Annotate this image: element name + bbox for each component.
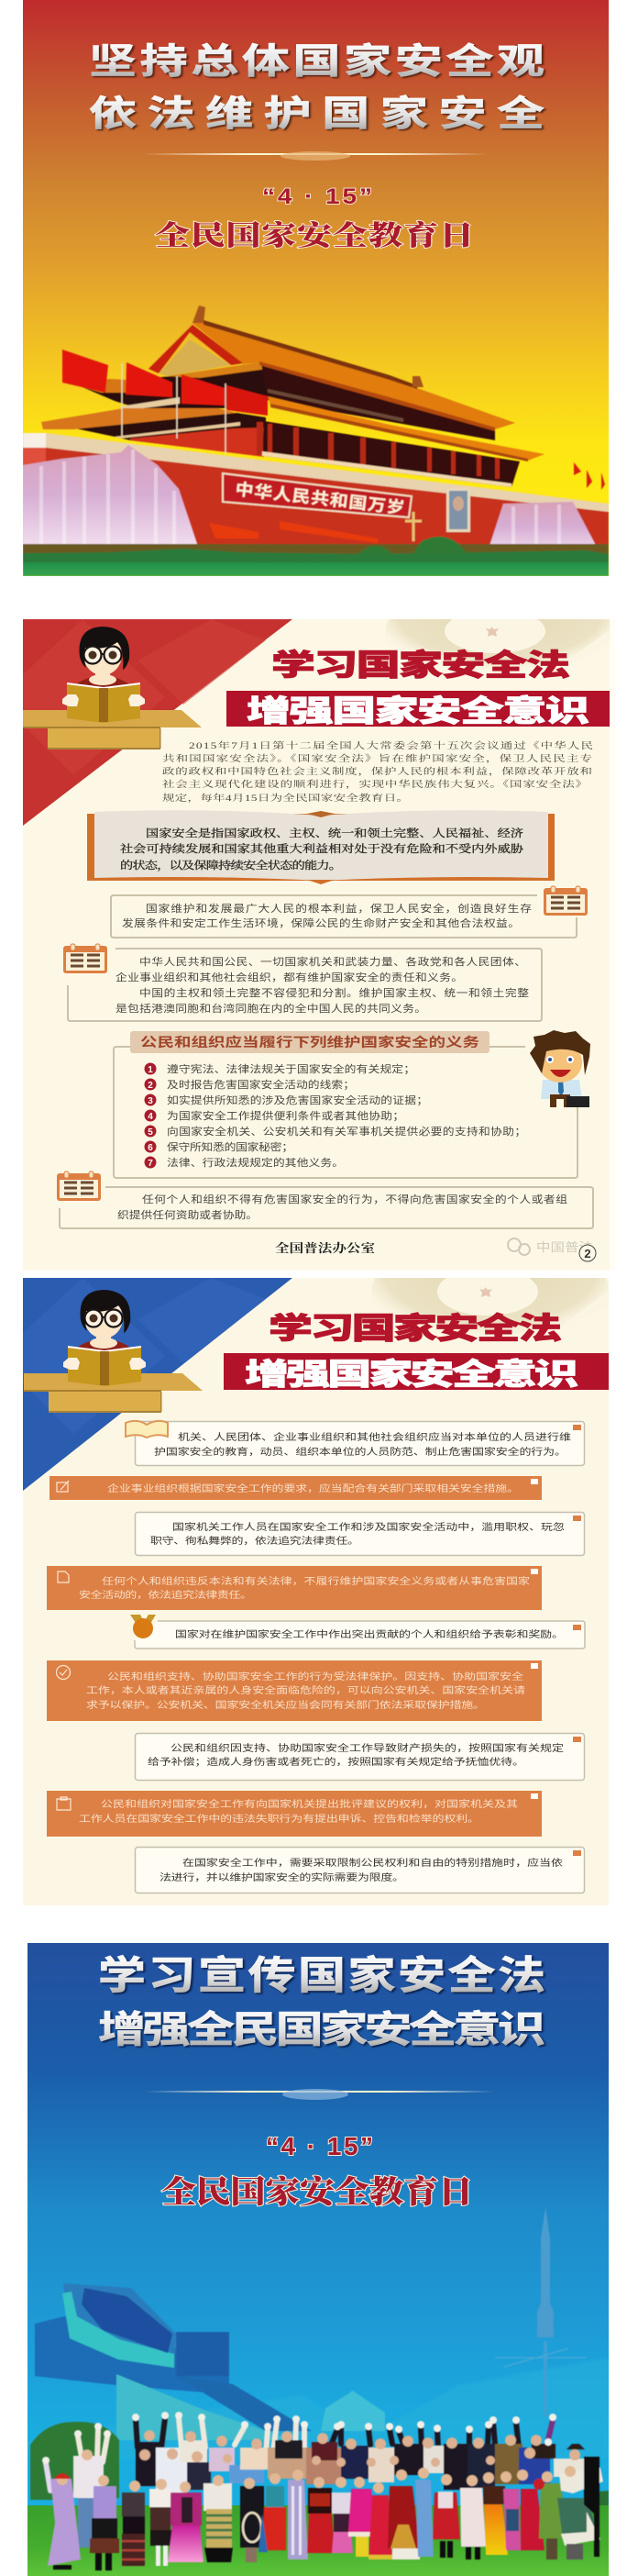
swirl ornament xyxy=(372,1278,609,1332)
red hat xyxy=(54,2473,71,2479)
panel: blue Great Wall poster xyxy=(28,1943,609,2576)
text box A: 发展条件和安定工作生活环境，保障公民的生命财产安全和其他合法权益。 xyxy=(122,917,520,929)
date 4.15: “4 · 15” xyxy=(262,183,372,208)
icon: calendar B xyxy=(63,944,107,973)
lower roof xyxy=(268,396,544,461)
portrait xyxy=(446,488,470,532)
orange bar 1 xyxy=(50,1476,542,1500)
watermark: 2 xyxy=(584,1247,591,1260)
ornament divider xyxy=(145,2089,495,2100)
heading: study law: 学习国家安全法 xyxy=(271,649,570,682)
illustration: Tiananmen gate xyxy=(23,305,609,576)
duties items: 遵守宪法、法律法规关于国家安全的有关规定； xyxy=(167,1063,415,1075)
education day heading: 全民国家安全教育日 xyxy=(155,220,474,251)
icon: open book xyxy=(126,1421,168,1438)
raised arms xyxy=(46,2418,553,2491)
duties heading pill: 公民和组织应当履行下列维护国家安全的义务 xyxy=(140,1035,479,1049)
intro paragraph: 政的政权和中国特色社会主义制度，保护人民的根本利益，保障改革开放和 xyxy=(162,766,592,776)
intro paragraph: 规定，每年4月15日为全民国家安全教育日。 xyxy=(162,793,409,803)
note card 2: 职守、徇私舞弊的，依法追究法律责任。 xyxy=(150,1535,359,1547)
note card 4: 公民和组织因支持、协助国家安全工作导致财产损失的，按照国家有关规定 xyxy=(170,1742,564,1754)
title line 2: 依法维护国家安全 xyxy=(89,94,544,133)
duties items: 法律、行政法规规定的其他义务。 xyxy=(167,1157,344,1169)
icon: check circle xyxy=(57,1666,70,1679)
fountains xyxy=(23,445,600,552)
duties number bullets: 7 xyxy=(148,1159,153,1169)
reader character on box xyxy=(23,627,202,749)
duties items xyxy=(167,1063,526,1169)
education day heading: 全民国家安全教育日 xyxy=(161,2174,473,2210)
colonnade xyxy=(257,421,520,487)
duties number bullets: 4 xyxy=(148,1112,153,1122)
duties number bullets: 3 xyxy=(148,1096,153,1106)
orange bar 1: 企业事业组织根据国家安全工作的要求，应当配合有关部门采取相关安全措施。 xyxy=(107,1482,519,1494)
reader character on box xyxy=(24,1290,203,1413)
text box D xyxy=(60,1187,593,1228)
rocket and launch tower xyxy=(495,2207,587,2416)
panel: red Tiananmen poster xyxy=(23,0,609,576)
back row heads xyxy=(139,2430,580,2467)
orange bar 2: 任何个人和组织违反本法和有关法律，不履行维护国家安全义务或者从事危害国家 xyxy=(102,1575,530,1587)
banner slogan: 中华人民共和国万岁 xyxy=(234,480,406,518)
note card 4 xyxy=(136,1734,585,1780)
blue corner triangle xyxy=(23,1278,292,1491)
open book definition box xyxy=(87,810,555,884)
panel: blue law-study poster xyxy=(23,1233,610,1905)
front row faces xyxy=(57,2449,576,2493)
orange bar 4 xyxy=(47,1791,542,1837)
watermark: 中国普法 xyxy=(536,1240,593,1255)
red flags xyxy=(62,350,605,490)
heading: study law: 学习国家安全法 xyxy=(269,1312,562,1345)
note card 5: 法进行，并以维护国家安全的实际需要为限度。 xyxy=(160,1871,404,1883)
upper storey xyxy=(261,363,495,440)
text box D: 任何个人和组织不得有危害国家安全的行为，不得向危害国家安全的个人或者组 xyxy=(142,1194,567,1205)
left wing lower tier xyxy=(41,408,266,457)
text box B: 中国的主权和领土完整不容侵犯和分割。维护国家主权、统一和领土完整 xyxy=(139,987,529,999)
note card 2 xyxy=(136,1512,585,1556)
orange bar 3: 工作，本人或者其近亲属的人身安全面临危险的，可以向公安机关、国家安全机关请 xyxy=(86,1684,525,1696)
open book definition box: 国家安全是指国家政权、主权、统一和领土完整、人民福祉、经济 xyxy=(146,827,523,839)
lamp xyxy=(405,512,422,541)
duties number bullets xyxy=(145,1062,156,1169)
note card 2: 国家机关工作人员在国家安全工作和涉及国家安全活动中，滥用职权、玩忽 xyxy=(172,1521,565,1533)
duties number bullets: 6 xyxy=(148,1143,153,1153)
intro paragraph: 2015年7月1日第十二届全国人大常委会第十五次会议通过《中华人民 xyxy=(189,740,593,750)
watermark xyxy=(508,1238,596,1261)
text box B xyxy=(68,949,542,1021)
duties number bullets: 2 xyxy=(148,1081,153,1091)
poster 2 background xyxy=(23,619,615,1271)
duties items: 保守所知悉的国家秘密； xyxy=(167,1141,293,1153)
icon: medal xyxy=(130,1615,156,1638)
footer issuer: 全国普法办公室 xyxy=(275,1240,375,1256)
text box B: 中华人民共和国公民、一切国家机关和武装力量、各政党和各人民团体、 xyxy=(139,956,526,968)
orange bar 2: 安全活动的，依法追究法律责任。 xyxy=(79,1589,252,1601)
cartoon man with briefcase xyxy=(530,1030,590,1107)
grass and hedges xyxy=(23,537,609,576)
note card 1: 护国家安全的教育，动员、组织本单位的人员防范、制止危害国家安全的行为。 xyxy=(154,1446,566,1458)
poster gradient background xyxy=(23,0,609,576)
note card 3 xyxy=(135,1621,585,1649)
note card 5 xyxy=(136,1848,585,1893)
note card 3: 国家对在维护国家安全工作中作出突出贡献的个人和组织给予表彰和奖励。 xyxy=(175,1628,564,1640)
red corner triangle xyxy=(23,619,292,826)
poster gradient background xyxy=(28,1943,609,2505)
back row torsos xyxy=(136,2440,590,2493)
open book definition box: 的状态，以及保障持续安全状态的能力。 xyxy=(120,859,342,872)
note card 5: 在国家安全工作中，需要采取限制公民权利和自由的特别措施时，应当依 xyxy=(182,1857,563,1869)
icon: pencil note xyxy=(57,1481,69,1492)
intro paragraph: 社会主义现代化建设的顺利进行，实现中华民族伟大复兴。《国家安全法》 xyxy=(162,779,588,789)
text box B: 企业事业组织和其他社会组织，都有维护国家安全的责任和义务。 xyxy=(116,972,463,983)
icon: calendar D xyxy=(57,1171,101,1201)
poster 3 background xyxy=(23,1278,609,1905)
text box A: 国家维护和发展最广大人民的根本利益，保卫人民安全，创造良好生存 xyxy=(146,903,532,915)
front row right figures xyxy=(348,2444,603,2559)
swirl ornament xyxy=(385,619,610,668)
orange bar 3: 公民和组织支持、协助国家安全工作的行为受法律保护。因支持、协助国家安全 xyxy=(107,1671,523,1682)
title line 2: 增强全民国家安全意识 xyxy=(98,2008,545,2050)
duties items: 如实提供所知悉的涉及危害国家安全活动的证据； xyxy=(167,1094,428,1106)
duties number bullets: 1 xyxy=(148,1065,153,1075)
icon: document xyxy=(58,1571,69,1582)
orange bar 4: 工作人员在国家安全工作中的违法失职行为有提出申诉、控告和检举的权利。 xyxy=(79,1813,479,1825)
text box A xyxy=(111,895,577,938)
orange bar 2 xyxy=(47,1566,542,1610)
red banner heading: 增强国家安全意识 xyxy=(247,694,589,727)
trees xyxy=(29,2421,609,2505)
intro paragraph: 共和国国家安全法》。《国家安全法》旨在维护国家安全，保卫人民民主专 xyxy=(162,753,592,763)
duties items: 及时报告危害国家安全活动的线索； xyxy=(167,1079,355,1091)
upper roof xyxy=(148,305,515,431)
title line 1: 坚持总体国家安全观 xyxy=(89,42,544,81)
gate wall xyxy=(23,433,609,554)
open book definition box: 社会可持续发展和国家其他重大利益相对处于没有危险和不受内外威胁 xyxy=(120,842,524,855)
title line 1: 学习宣传国家安全法 xyxy=(98,1954,545,1998)
duties number bullets: 5 xyxy=(148,1127,153,1138)
orange bar 3: 求予以保护。公安机关、国家安全机关应当会同有关部门依法采取保护措施。 xyxy=(86,1699,485,1711)
grass xyxy=(28,2505,609,2576)
icon: clipboard xyxy=(57,1797,71,1810)
text box B: 是包括港澳同胞和台湾同胞在内的全中国人民的共同义务。 xyxy=(116,1003,426,1015)
duties items: 向国家安全机关、公安机关和有关军事机关提供必要的支持和协助； xyxy=(167,1126,526,1138)
duties list box xyxy=(114,1031,578,1178)
illustration: Great Wall xyxy=(35,2283,385,2440)
note card 1 xyxy=(136,1422,585,1466)
red banner heading: 增强国家安全意识 xyxy=(245,1358,578,1391)
duties heading pill xyxy=(130,1031,490,1053)
date 4.15: “4 · 15” xyxy=(266,2132,373,2160)
illustration: mountains xyxy=(528,2360,607,2376)
crowd of people in ethnic dress xyxy=(46,2415,603,2570)
raised hands xyxy=(46,2415,553,2460)
left wing upper storey xyxy=(82,362,268,411)
icon: calendar A xyxy=(544,886,588,916)
intro paragraph xyxy=(162,740,593,803)
ornament divider xyxy=(143,151,489,161)
note card 4: 给予补偿；造成人身伤害或者死亡的，按照国家有关规定给予抚恤优待。 xyxy=(148,1756,524,1768)
duties items: 为国家安全工作提供便利条件或者其他协助； xyxy=(167,1110,404,1122)
panel: red law-study poster xyxy=(23,580,615,1271)
note card 1: 机关、人民团体、企业事业组织和其他社会组织应当对本单位的人员进行维 xyxy=(178,1431,571,1443)
orange bar 4: 公民和组织对国家安全工作有向国家机关提出批评建议的权利，对国家机关及其 xyxy=(101,1798,518,1810)
text box D: 织提供任何资助或者协助。 xyxy=(117,1209,258,1221)
front row left figures xyxy=(48,2456,353,2570)
orange bar 3 xyxy=(47,1660,542,1721)
